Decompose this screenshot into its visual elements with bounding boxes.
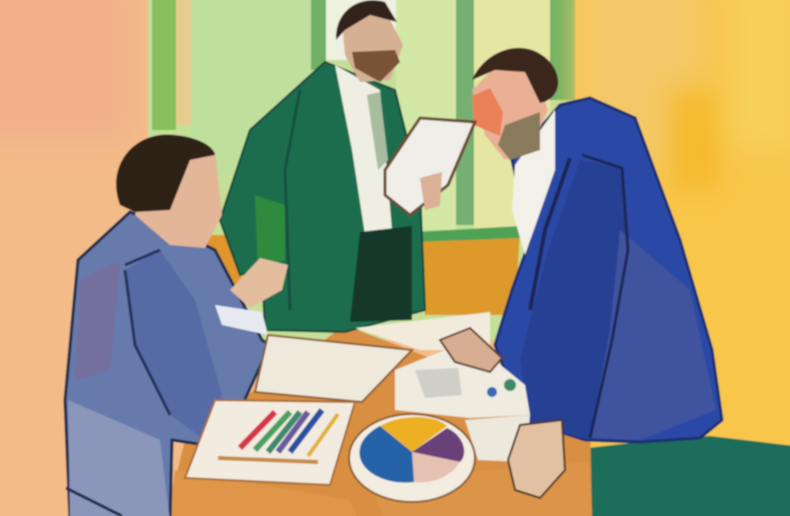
- man on the right: body in blue jacket: [472, 48, 722, 442]
- man on the left: blue-grey jacket: [65, 135, 288, 516]
- table: [165, 325, 592, 516]
- papers on the table: [255, 312, 530, 462]
- wood panel behind the men: [190, 235, 250, 330]
- head of the centre man: [336, 0, 403, 82]
- man in the centre: green suit: [220, 0, 475, 332]
- chart sheet with coloured bars: [185, 400, 355, 485]
- pie chart on a plate: [349, 414, 475, 502]
- hand and cuff of the left man: [230, 258, 288, 308]
- head of the right man: [472, 48, 558, 160]
- head of the left man: [116, 135, 222, 248]
- document held by the centre man: [385, 118, 475, 215]
- hand of the right man on table: [508, 420, 565, 498]
- hand of the right man with pen: [440, 328, 502, 372]
- floor: green carpet: [587, 436, 790, 516]
